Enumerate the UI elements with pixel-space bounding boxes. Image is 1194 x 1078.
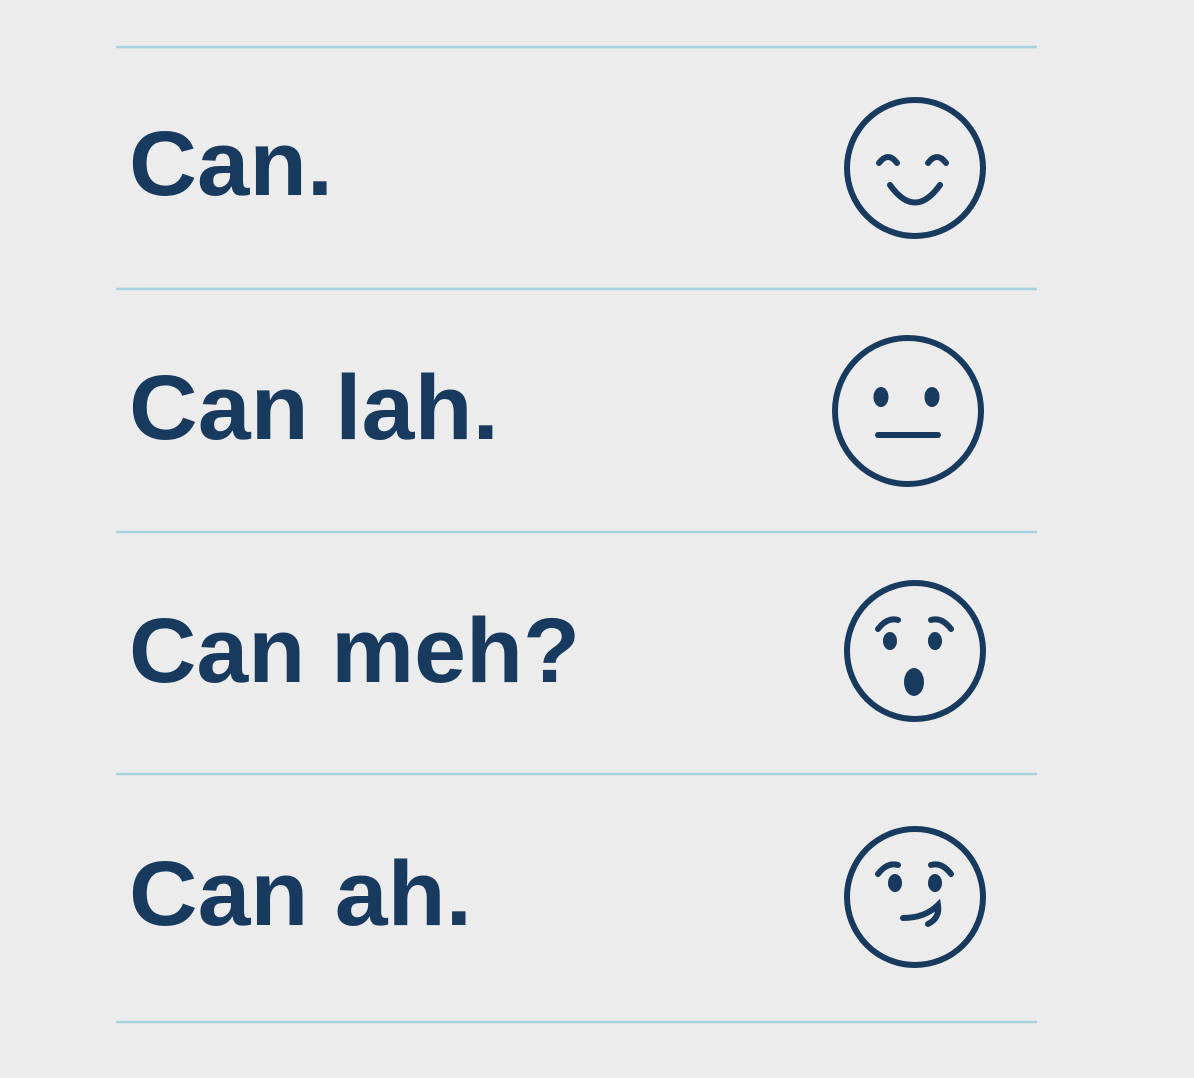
icon: surprised face: [847, 583, 983, 719]
text: Can meh?: Can meh?: [129, 600, 580, 702]
text: Can ah.: Can ah.: [129, 843, 472, 945]
text: Can lah.: Can lah.: [129, 357, 499, 459]
icon: smirking face: [847, 829, 983, 965]
icon: happy face: [847, 100, 983, 236]
text: Can.: Can.: [129, 113, 333, 215]
icon: neutral face: [835, 338, 981, 484]
